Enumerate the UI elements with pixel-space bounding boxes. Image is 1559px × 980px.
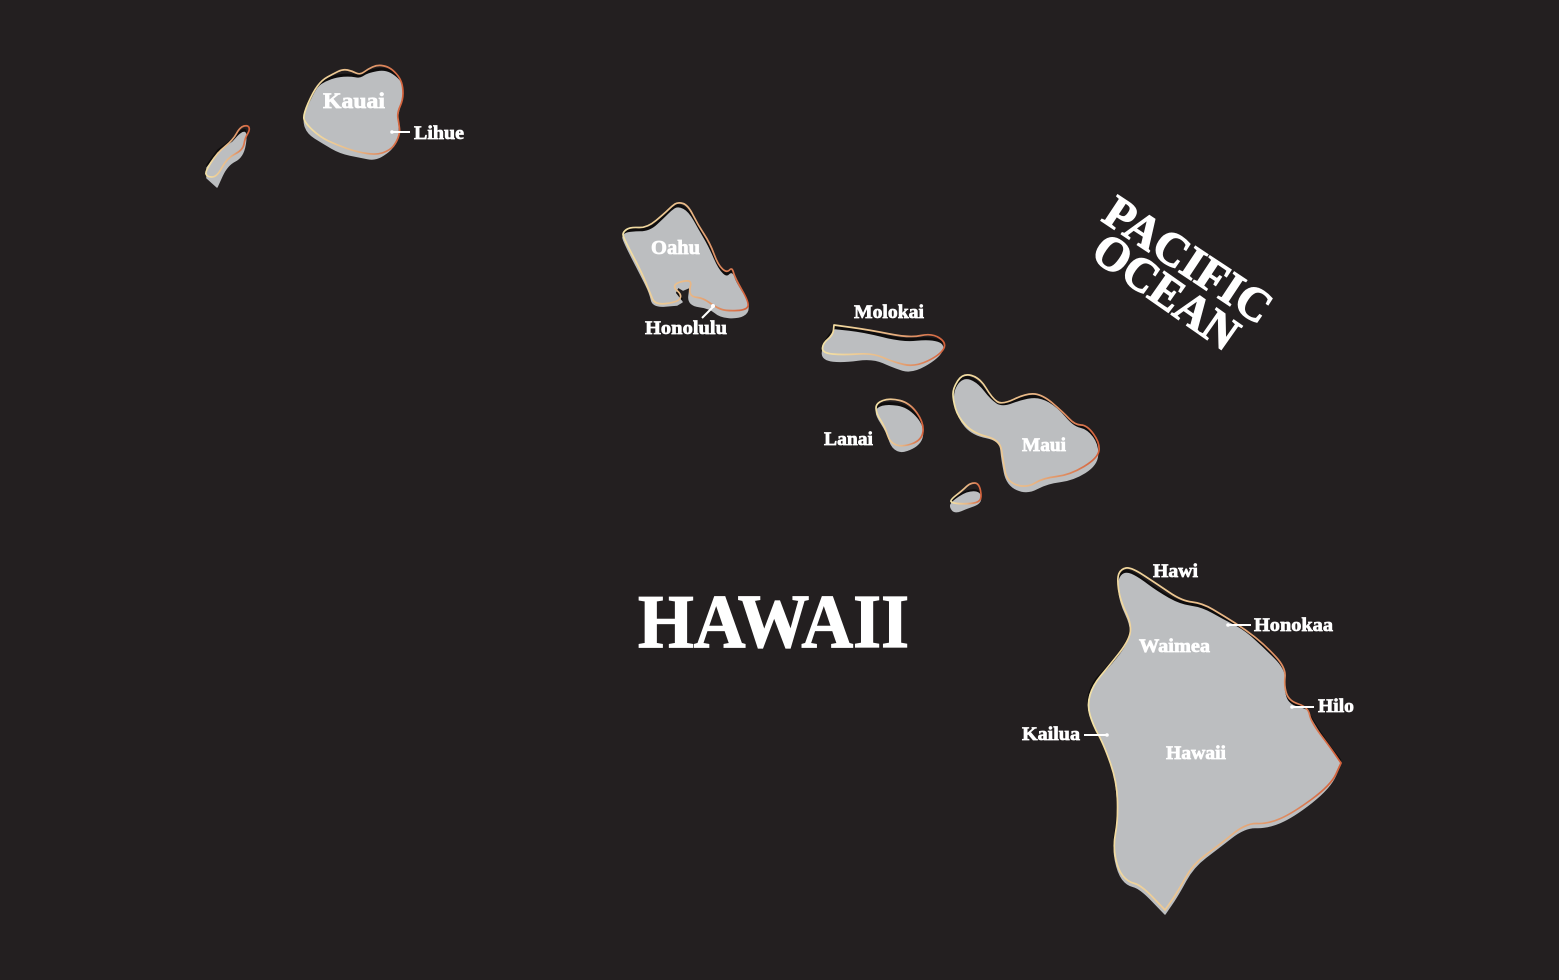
- label: Hawaii island: Hawaii: [1166, 743, 1226, 764]
- label: Lanai: Lanai: [824, 429, 873, 450]
- island: Oahu: [623, 203, 748, 318]
- callout: Kailua: Kailua: [1022, 724, 1081, 745]
- label: Kauai: Kauai: [323, 88, 385, 113]
- callout: Kailua: [1022, 724, 1109, 745]
- heading: PACIFIC OCEAN: OCEAN: [1083, 223, 1249, 361]
- callout: Hilo: [1290, 696, 1354, 717]
- title: HAWAII: HAWAII: [638, 580, 909, 664]
- callout: Lihue: [390, 123, 464, 144]
- callout: Hilo: Hilo: [1318, 696, 1354, 717]
- label: Oahu: Oahu: [651, 237, 700, 259]
- island: Kauai: [304, 65, 403, 159]
- label: Maui: Maui: [1022, 435, 1066, 456]
- island: Molokai: [822, 325, 945, 371]
- label: Hawi: Hawi: [1153, 561, 1198, 582]
- callout: Honolulu: [645, 304, 727, 339]
- callout: Honokaa: [1226, 615, 1334, 636]
- callout: Lihue: Lihue: [414, 123, 464, 144]
- island: Lanai: [876, 399, 923, 451]
- callout: Honokaa: Honokaa: [1254, 615, 1334, 636]
- island: Kahoolawe: [951, 483, 981, 512]
- island: Maui: [953, 375, 1099, 492]
- island: Hawaii big island: [1088, 568, 1341, 914]
- island: Niihau: [206, 126, 249, 187]
- heading: PACIFIC OCEAN: PACIFIC: [1094, 186, 1282, 335]
- label: Molokai: Molokai: [854, 302, 924, 323]
- callout: Honolulu: Honolulu: [645, 318, 727, 339]
- label: Waimea: Waimea: [1139, 636, 1211, 657]
